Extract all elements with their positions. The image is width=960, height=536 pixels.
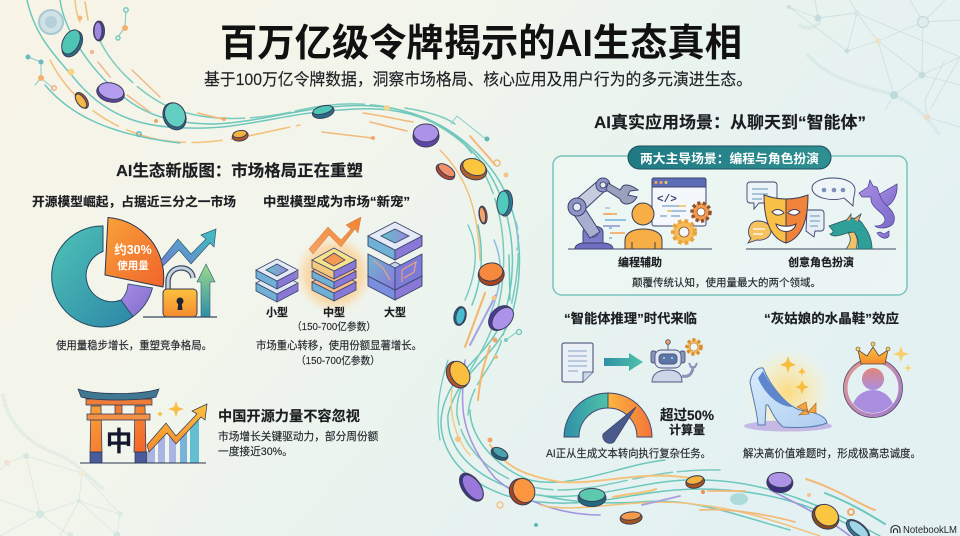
subheading: open source: 开源模型崛起，占据近三分之一市场 — [32, 194, 236, 209]
text: China open source: 市场增长关键驱动力，部分周份额 — [218, 430, 379, 443]
icon: crowned loyal user — [844, 342, 912, 418]
heading: applications: AI真实应用场景：从聊天到“智能体” — [594, 112, 866, 132]
icon: arrow to robot — [604, 353, 643, 371]
panel: two main scenarios — [553, 146, 907, 295]
icon: person — [625, 203, 662, 249]
heading: agent era: “智能体推理”时代来临 — [564, 311, 697, 326]
icon: teal dragon — [829, 214, 872, 249]
text: China open source: 一度接近30%。 — [218, 445, 293, 458]
icon: torii gate with rising chart: 中 — [106, 427, 132, 457]
caption: scenarios: 颠覆传统认知，使用量最大的两个领域。 — [632, 276, 821, 289]
pill heading — [628, 146, 831, 169]
icon: medium model stack highlighted — [294, 234, 374, 314]
label: role play: 创意角色扮演 — [788, 255, 854, 269]
label: coding: 编程辅助 — [618, 255, 662, 269]
subtitle: 基于100万亿令牌数据，洞察市场格局、核心应用及用户行为的多元演进生态。 — [204, 70, 752, 89]
subheading: mid models: 中型模型成为市场“新宠” — [263, 194, 410, 209]
icon: code lines — [603, 208, 626, 238]
chart baseline — [143, 316, 217, 318]
label: small: 小型 — [266, 306, 288, 319]
label: compute: 计算量 — [669, 422, 705, 437]
donut chart: open source share — [52, 218, 164, 327]
icon: document — [562, 343, 593, 382]
label: medium parameters: （150-700亿参数） — [292, 320, 376, 333]
icon: rising arrow over medium — [309, 217, 361, 254]
icon: torii gate with rising chart — [78, 389, 207, 463]
ground lines — [568, 248, 896, 250]
label: over 50 percent: 超过50% — [660, 407, 715, 423]
icon: code window: </> — [657, 194, 677, 206]
label: large: 大型 — [384, 305, 406, 319]
donut chart: open source share: 约30% — [114, 242, 152, 257]
icon: gears — [673, 203, 710, 243]
caption: mid models: 市场重心转移，使用份额显著增长。 — [256, 338, 422, 352]
label: medium: 中型 — [323, 305, 345, 319]
caption: open source: 使用量稳步增长，重塑竞争格局。 — [56, 338, 212, 352]
heading: market: AI生态新版图：市场格局正在重塑 — [116, 161, 363, 180]
heading: Cinderella: “灰姑娘的水晶鞋”效应 — [764, 311, 899, 326]
panel: agent inference — [546, 311, 715, 460]
heading: China open source: 中国开源力量不容忽视 — [218, 408, 360, 424]
icon: large model stack — [368, 222, 422, 300]
decorative network: top right — [787, 0, 960, 135]
icon: open padlock — [163, 268, 197, 317]
icon: up arrow — [197, 264, 215, 317]
panel: Cinderella slipper — [743, 311, 921, 460]
title: 百万亿级令牌揭示的AI生态真相 — [220, 23, 742, 65]
caption: agent: AI正从生成文本转向执行复杂任务。 — [546, 446, 711, 460]
icon: small model stack — [256, 259, 298, 302]
icon: robot arm — [568, 178, 638, 249]
donut chart: open source share: 使用量 — [117, 259, 149, 272]
caption: Cinderella: 解决高价值难题时，形成极高忠诚度。 — [743, 446, 921, 460]
icon: theatre mask — [764, 195, 808, 243]
icon: purple dragon — [859, 180, 897, 238]
icon: glass slipper — [744, 348, 832, 436]
gauge: compute share — [564, 393, 652, 443]
panel: market landscape — [32, 161, 422, 367]
decorative network: bottom left — [0, 395, 123, 536]
icon: speech bubbles — [747, 178, 855, 243]
icon: code window — [652, 178, 706, 226]
icon: robot — [651, 340, 701, 382]
pill heading: 两大主导场景：编程与角色扮演 — [640, 151, 819, 166]
caption: mid models parameters: （150-700亿参数） — [296, 354, 380, 367]
icon: growth arrow — [161, 229, 216, 266]
